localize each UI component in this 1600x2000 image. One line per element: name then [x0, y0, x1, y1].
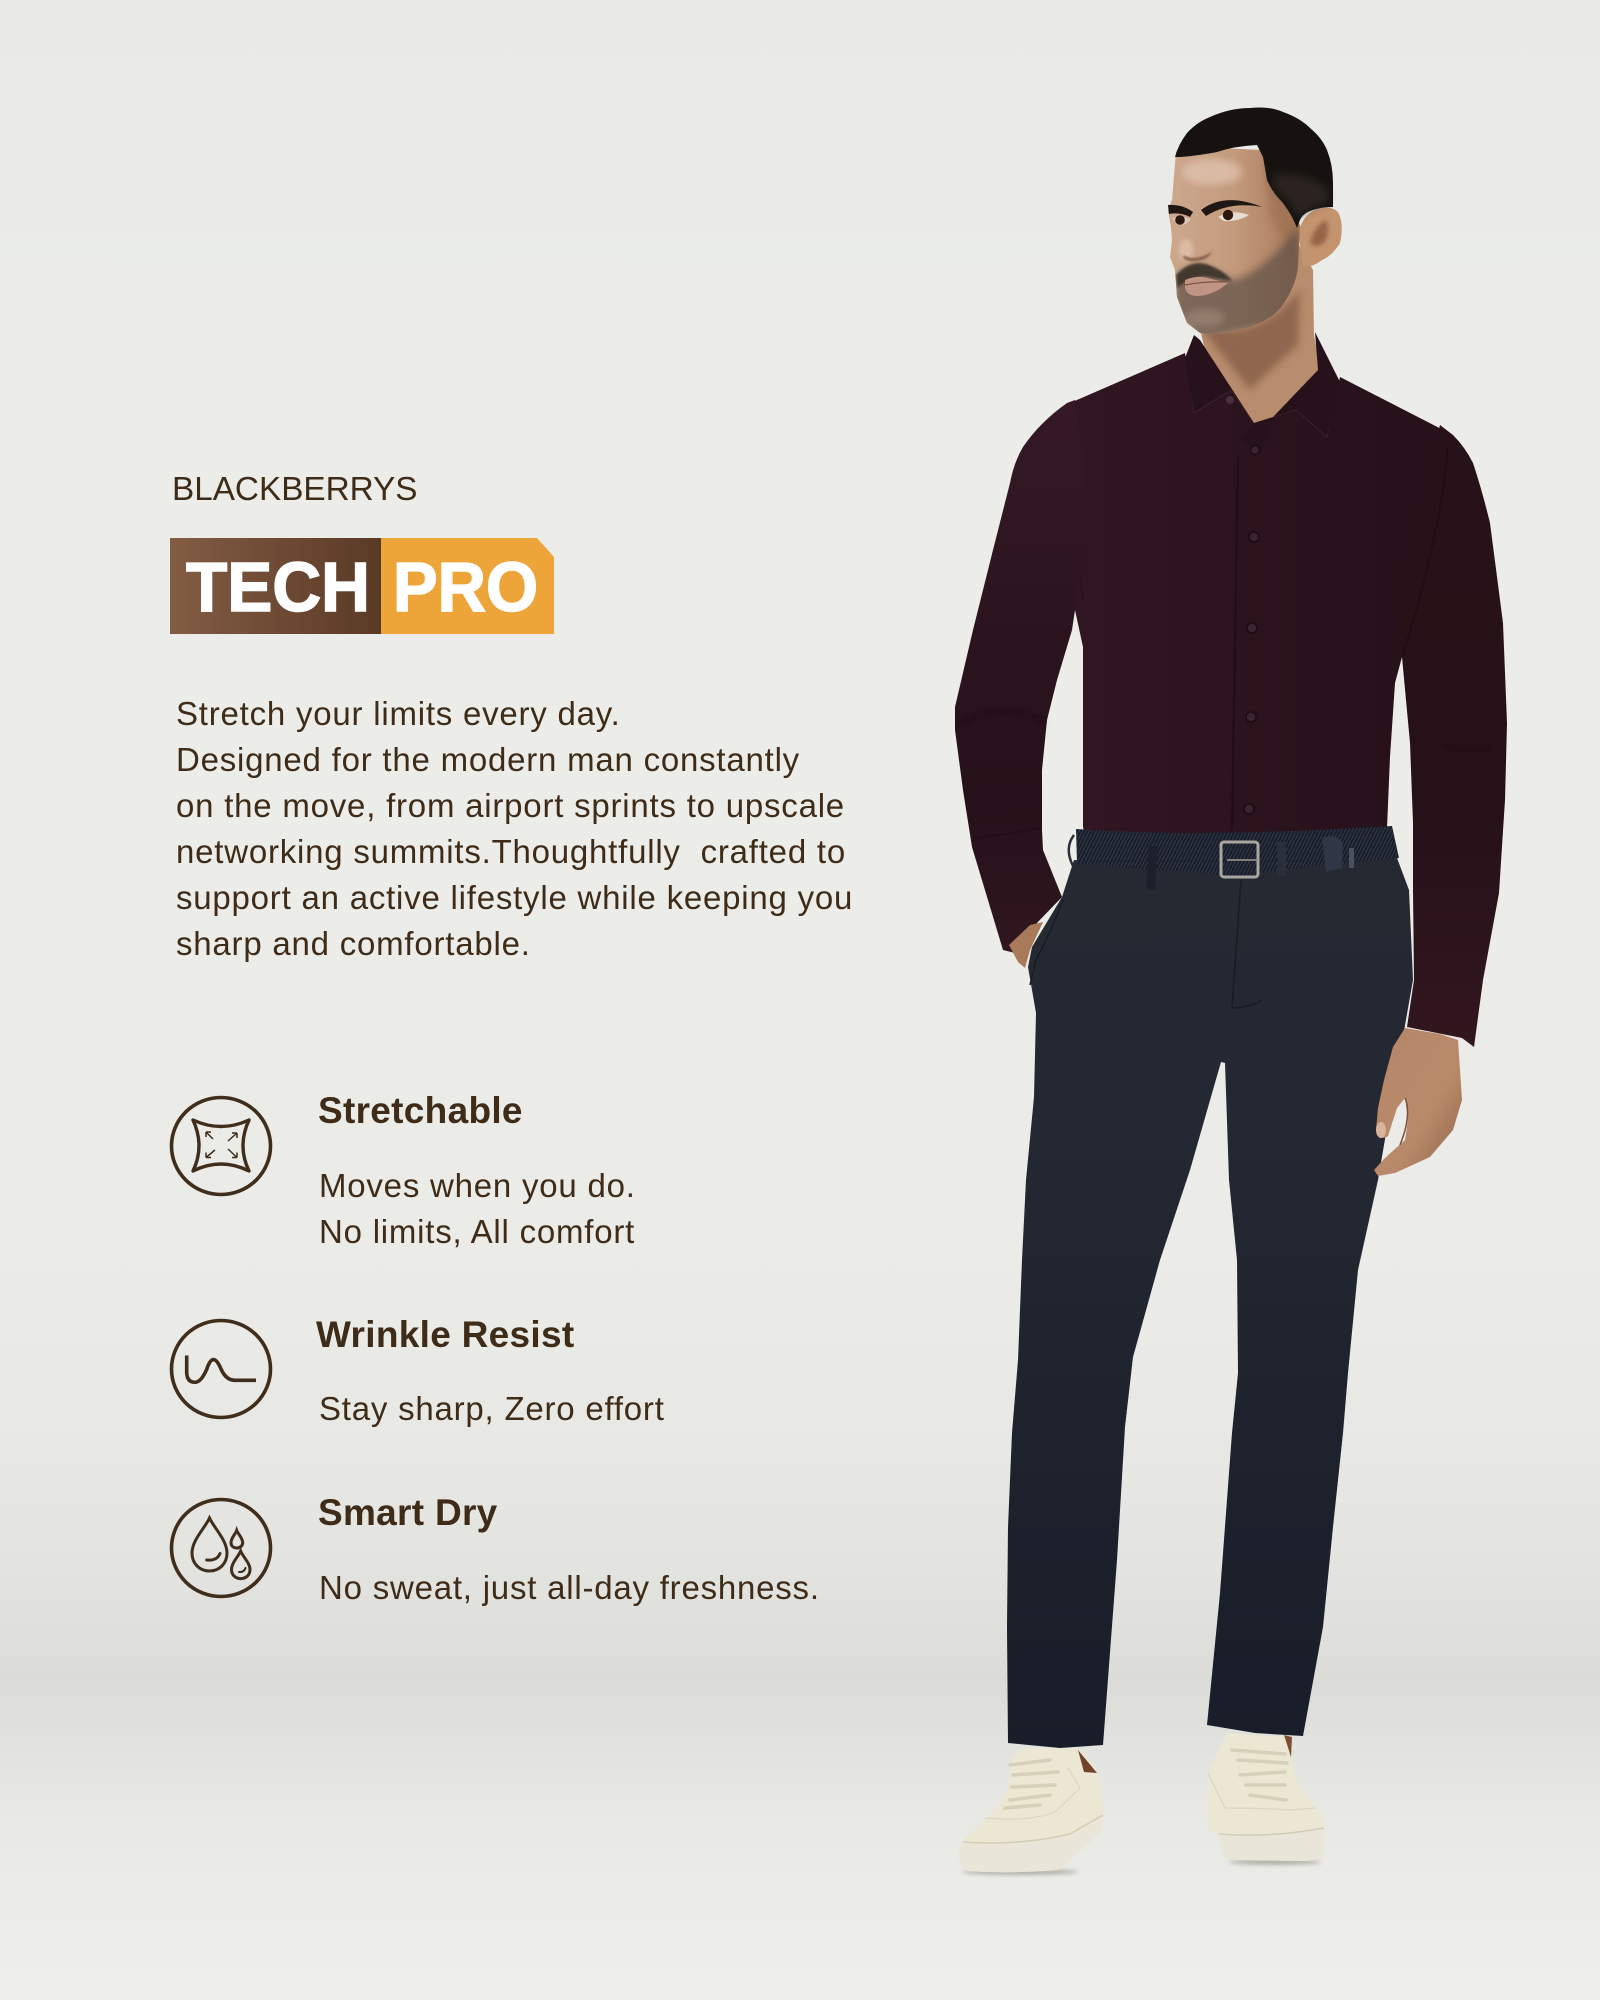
intro paragraph: networking summits.Thoughtfully crafted to	[176, 832, 846, 870]
hair	[1175, 108, 1333, 228]
logo: Tech Pro badge: TECH	[186, 548, 370, 626]
brand name: BLACKBERRYS	[172, 471, 418, 508]
right shoe	[1207, 1733, 1325, 1861]
description: Stretchable	[319, 1166, 636, 1250]
armhole seams	[1070, 415, 1083, 600]
icon: wrinkle wave	[170, 1318, 272, 1420]
intro paragraph: sharp and comfortable.	[176, 924, 531, 962]
placket	[1232, 455, 1238, 830]
nose shadow	[1183, 252, 1212, 261]
intro paragraph: support an active lifestyle while keeping you	[176, 878, 853, 916]
shirt torso and collar	[1070, 332, 1453, 845]
trouser fly	[1232, 880, 1262, 1008]
description: Wrinkle Resist: Stay sharp, Zero effort	[319, 1390, 665, 1427]
trousers	[1007, 858, 1413, 1748]
intro paragraph: Designed for the modern man constantly	[176, 740, 800, 778]
left hand in pocket	[1009, 922, 1043, 968]
far eyebrow	[1168, 205, 1193, 217]
icon: water drops	[170, 1498, 272, 1598]
description: Stretchable: Moves when you do.	[319, 1166, 636, 1204]
ear	[1298, 208, 1342, 266]
intro paragraph: on the move, from airport sprints to upscale	[176, 786, 845, 824]
buckle	[1221, 842, 1258, 877]
intro paragraph: Stretch your limits every day.	[176, 694, 621, 732]
pocket line	[1030, 900, 1063, 985]
left shoe	[959, 1748, 1103, 1872]
belt loops	[1146, 846, 1158, 890]
heading: Smart Dry: Smart Dry	[318, 1492, 498, 1533]
shirt buttons	[1244, 446, 1260, 814]
collar button	[1226, 396, 1234, 404]
icon: stretch fabric	[170, 1096, 272, 1196]
belt	[1069, 826, 1399, 890]
description: Smart Dry: No sweat, just all-day freshness.	[319, 1568, 820, 1606]
floor shadows under shoes	[962, 1860, 1321, 1874]
left sleeve	[955, 400, 1090, 953]
hair fade highlight	[1272, 174, 1328, 218]
neck	[1201, 246, 1318, 423]
logo: Tech Pro badge: PRO	[393, 548, 538, 626]
face	[1168, 148, 1302, 340]
right hand	[1374, 1028, 1462, 1176]
eyes	[1218, 212, 1249, 221]
heading: Stretchable: Stretchable	[318, 1090, 523, 1131]
feature: Smart Dry	[170, 1492, 820, 1606]
leather keeper	[1322, 836, 1343, 872]
beard	[1175, 226, 1302, 340]
near eyebrow	[1201, 200, 1262, 216]
right sleeve	[1395, 425, 1507, 1047]
feature: Wrinkle Resist	[170, 1314, 665, 1427]
lips	[1185, 277, 1229, 296]
illustration: man wearing shirt, trousers and sneakers	[955, 108, 1507, 1877]
intro paragraph	[176, 694, 853, 962]
description: Stretchable: No limits, All comfort	[319, 1212, 635, 1250]
logo: Tech Pro badge	[170, 538, 554, 634]
collar	[1185, 332, 1340, 452]
feature: Stretchable	[170, 1090, 636, 1250]
heading: Wrinkle Resist: Wrinkle Resist	[316, 1314, 575, 1355]
moustache	[1176, 263, 1232, 288]
